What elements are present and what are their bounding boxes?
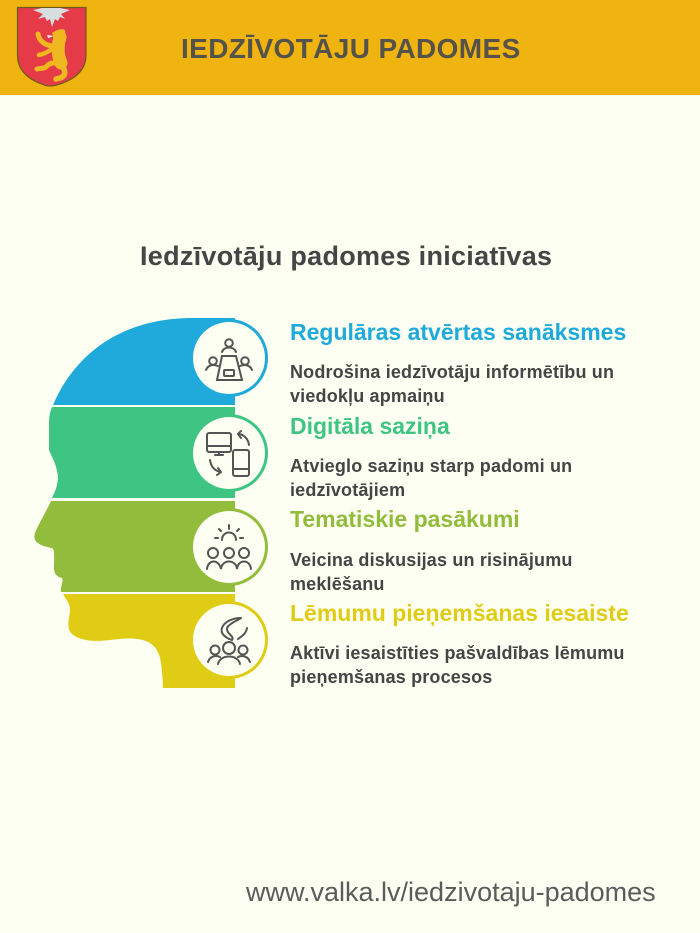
- item 1 text: [290, 362, 614, 406]
- item 1 heading: Regulāras atvērtas sanāksmes: [290, 319, 626, 345]
- item 2 text: Atvieglo saziņu starp padomi un: [290, 456, 572, 476]
- blue segment: [53, 318, 268, 405]
- website url: www.valka.lv/iedzivotaju-padomes: [246, 877, 656, 907]
- item 4 text: Aktīvi iesaistīties pašvaldības lēmumu: [290, 643, 625, 663]
- item 1 text: viedokļu apmaiņu: [290, 386, 445, 406]
- item 2 heading: Digitāla saziņa: [290, 413, 450, 439]
- yellow segment: [63, 594, 268, 688]
- item 1 text: Nodrošina iedzīvotāju informētību un: [290, 362, 614, 382]
- item 2 text: [290, 456, 572, 500]
- item 3 text: Veicina diskusijas un risinājumu: [290, 550, 573, 570]
- item 2 text: iedzīvotājiem: [290, 480, 405, 500]
- olive segment: [34, 501, 268, 592]
- item 3 text: meklēšanu: [290, 574, 385, 594]
- header band: [0, 0, 700, 95]
- item 3 text: [290, 550, 573, 594]
- coat of arms: [16, 6, 87, 87]
- section heading: Iedzīvotāju padomes iniciatīvas: [140, 241, 552, 271]
- icon: group with sun: [207, 525, 251, 569]
- icon: devices: [207, 431, 249, 476]
- item 4 text: pieņemšanas procesos: [290, 667, 492, 687]
- item 3 heading: Tematiskie pasākumi: [290, 506, 520, 532]
- head diagram: [34, 318, 268, 688]
- item 4 heading: Lēmumu pieņemšanas iesaiste: [290, 600, 629, 626]
- icon: hand over group: [208, 618, 250, 664]
- icon: meeting table: [206, 339, 252, 380]
- green segment: [49, 407, 268, 498]
- header title: IEDZĪVOTĀJU PADOMES: [181, 33, 521, 64]
- item 4 text: [290, 643, 625, 687]
